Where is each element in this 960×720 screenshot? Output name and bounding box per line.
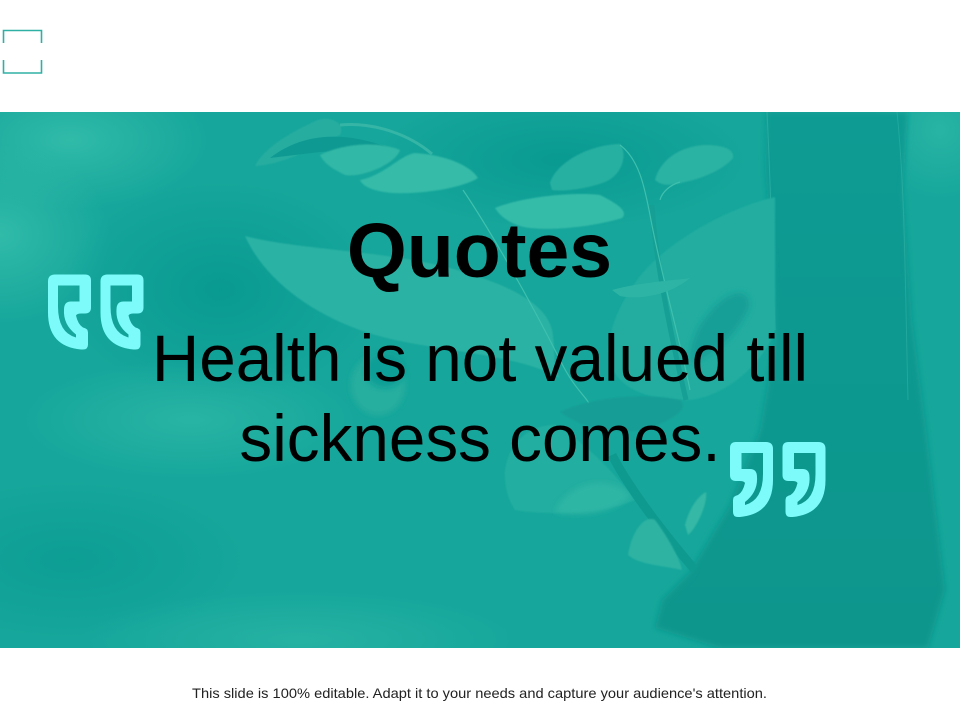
upper middle leaf — [550, 144, 624, 191]
icon: opening quotation mark — [48, 274, 144, 350]
quote text: Health is not valued till — [152, 322, 808, 395]
plant leaves and stems — [245, 119, 775, 570]
stems — [656, 256, 688, 400]
lower leaves — [505, 425, 635, 513]
upper right leaf — [655, 145, 733, 185]
tree trunk — [655, 112, 945, 648]
panel: teal plant photo background — [0, 112, 960, 648]
icon: closing quotation mark — [730, 442, 826, 517]
quote text — [152, 322, 808, 475]
icon: corner bracket logo mark — [4, 30, 42, 73]
large left leaf — [245, 236, 560, 378]
title: Quotes — [347, 208, 612, 294]
centre leaf — [495, 194, 624, 229]
upper leaf cluster — [255, 119, 341, 166]
footer note: This slide is 100% editable. Adapt it to your needs and capture your audience's attention. — [192, 685, 767, 701]
large right leaf — [608, 197, 775, 400]
quote text: sickness comes. — [239, 402, 721, 475]
